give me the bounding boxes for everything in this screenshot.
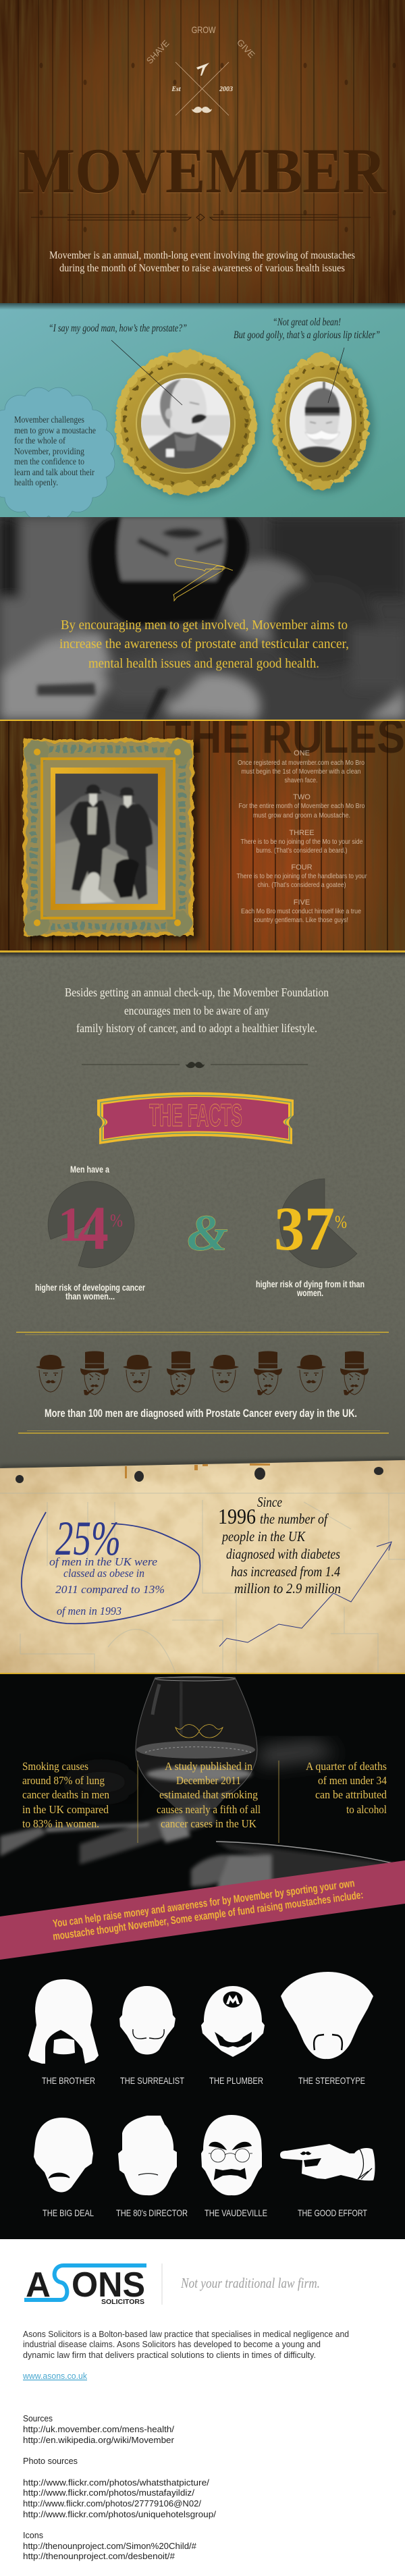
text: Movember aims: mental health issues and general good health. (88, 656, 319, 671)
icon: straight razor outline (173, 558, 233, 601)
style: the surrealist (119, 1986, 184, 2086)
rule five: Each Mo Bro must conduct himself like a true (241, 907, 361, 915)
panel: old paper (0, 1457, 405, 1673)
text: study December 2011: cancer cases in the UK (161, 1817, 257, 1830)
rule five: country gentleman. Like those guys! (254, 916, 348, 924)
sources: Sources (23, 2414, 53, 2423)
style: the 80's director: THE 80's DIRECTOR (116, 2207, 188, 2218)
rule four: chin. (That’s considered a goatee) (258, 881, 346, 889)
handwritten note: 25 percent obese: of men in the UK were (49, 1555, 157, 1568)
quote: prostate: “I say my good man, how’s the prostate?” (49, 323, 187, 334)
photo: moustached man in barber's chair (0, 517, 405, 720)
text: diabetes since 1996: Since (257, 1494, 282, 1510)
title: MOVEMBER: MOVEMBER (18, 135, 387, 207)
text: smoking causes: in the UK compared (22, 1803, 109, 1816)
figure: left gentleman (70, 784, 110, 891)
text: quarter of deaths: to alcohol (346, 1803, 387, 1816)
panel: wooden header (0, 0, 405, 303)
callout: scalloped blob: November, providing (14, 446, 84, 456)
text: smoking causes: to 83% in women. (22, 1817, 99, 1830)
portrait frame: left officer (117, 350, 259, 498)
style: the plumber (201, 1986, 265, 2086)
text: quarter of deaths: of men under 34 (318, 1774, 387, 1787)
moustache styles (28, 1972, 375, 2218)
callout: scalloped blob: Movember challenges (14, 414, 84, 425)
text: study December 2011: causes nearly a fifth of all (157, 1803, 261, 1816)
website link: www.asons.co.uk (22, 2371, 88, 2381)
style: the stereotype: THE STEREOTYPE (298, 2075, 365, 2086)
ampersand: & (187, 1205, 228, 1262)
rule one: ONE (294, 749, 310, 757)
intro paragraph (49, 250, 355, 274)
tagline: Not your traditional law firm. (180, 2275, 320, 2291)
style: the brother: THE BROTHER (42, 2075, 95, 2086)
line chart arrow (219, 1542, 392, 1646)
logo: Asons Solicitors (24, 2265, 146, 2306)
callout: scalloped blob: health openly. (14, 477, 58, 487)
rule two: TWO (293, 793, 310, 801)
text: study December 2011: A study published in (165, 1760, 252, 1773)
panel: smoke and alcohol (0, 1673, 405, 2239)
sources: http://thenounproject.com/desbenoit/# (23, 2552, 175, 2561)
text: smoking causes: around 87% of lung (22, 1774, 105, 1787)
text: diabetes since 1996: people in the UK (221, 1528, 306, 1545)
handwritten note: 25 percent obese: of men in 1993 (57, 1605, 122, 1617)
style: the good effort (280, 2144, 375, 2218)
logo: Asons Solicitors: A (26, 2265, 51, 2305)
sources: http://www.flickr.com/photos/mustafayildiz/ (23, 2488, 195, 2498)
style: the vaudeville: THE VAUDEVILLE (205, 2207, 267, 2218)
emblem: Est 2003 (144, 24, 257, 115)
text: study December 2011: estimated that smoking (159, 1788, 258, 1801)
rule two: must grow and groom a Moustache. (253, 811, 350, 820)
rule four: FOUR (291, 863, 313, 871)
title: MOVEMBER: MOVEMBER (18, 136, 387, 207)
ornamental divider (31, 214, 371, 221)
emblem: Est 2003: Est (171, 86, 182, 93)
style: the vaudeville (201, 2115, 267, 2218)
sources: Photo sources (23, 2457, 78, 2466)
callout: scalloped blob: men the confidence to (14, 456, 84, 466)
about paragraph: industrial disease claims. Asons Solicitors has developed to become a young and (23, 2340, 321, 2349)
sources: http://www.flickr.com/photos/uniquehotelsgroup/ (23, 2510, 217, 2519)
style: the plumber: THE PLUMBER (209, 2075, 263, 2086)
handwritten note: 25 percent obese: 2011 compared to 13% (55, 1583, 165, 1596)
rule one: Once registered at movember.com each Mo Bro (238, 759, 364, 767)
emblem: Est 2003: 2003 (219, 86, 233, 93)
callout: scalloped blob (0, 387, 115, 520)
intro paragraph: during the month of November to raise awareness of various health issues (59, 263, 345, 274)
callout: scalloped blob: learn and talk about their (14, 467, 94, 477)
style: the big deal (34, 2118, 94, 2218)
handwritten note: 25 percent obese: classed as obese in (63, 1567, 144, 1580)
stat: 14 percent: 1 (58, 1198, 82, 1252)
stat: 37 percent (256, 1179, 364, 1298)
text: diabetes since 1996: the number of (260, 1511, 329, 1527)
rules list (236, 749, 367, 924)
emblem: Est 2003: SHAVE (144, 38, 171, 65)
stat: 14 percent: higher risk of developing cancer (35, 1282, 145, 1293)
style: the good effort: THE GOOD EFFORT (298, 2207, 367, 2218)
panel: teal portraits wall (0, 303, 405, 520)
text: diabetes since 1996: million to 2.9 million (234, 1580, 341, 1596)
stat: 37 percent: % (335, 1212, 347, 1232)
style: the surrealist: THE SURREALIST (120, 2075, 184, 2086)
about paragraph (23, 2330, 349, 2360)
rule three (240, 829, 363, 855)
banner: THE FACTS (97, 1092, 294, 1144)
text: Movember aims: increase the awareness of prostate and testicular cancer, (59, 637, 349, 651)
stat: 14 percent (35, 1164, 145, 1302)
picture frame: two gentlemen with dogs (24, 740, 198, 940)
emblem: Est 2003: GROW (192, 24, 216, 35)
figure: black dog (113, 859, 139, 898)
panel: leather facts (0, 952, 405, 1472)
icons: row of gentlemen (36, 1351, 369, 1395)
quote: lip tickler: “Not great old bean! (273, 317, 341, 328)
rule five (241, 898, 361, 924)
text: annual check-up (65, 986, 329, 1035)
text: diabetes since 1996: diagnosed with diabetes (226, 1546, 340, 1562)
text: smoking causes (22, 1760, 109, 1830)
stat: 14 percent: % (110, 1210, 123, 1231)
handwritten note: 25 percent obese: 25% (55, 1511, 121, 1565)
rule two (239, 793, 365, 820)
rule three: burns. (That’s considered a beard.) (256, 847, 347, 855)
style: the 80's director (116, 2116, 188, 2218)
figure: right gentleman (115, 787, 153, 900)
photo: glass and cigar (0, 1677, 405, 1890)
text: smoking causes: cancer deaths in men (22, 1788, 109, 1801)
rule one: shaven face. (285, 776, 317, 784)
rule one (238, 749, 364, 784)
sources: http://uk.movember.com/mens-health/ (23, 2425, 175, 2434)
stat: 37 percent: 37 (274, 1194, 335, 1263)
text: quarter of deaths (306, 1760, 387, 1816)
sources (23, 2414, 217, 2561)
text: diabetes since 1996: has increased from 1.4 (231, 1563, 340, 1580)
sources: http://thenounproject.com/Simon%20Child/# (23, 2542, 196, 2551)
stat: 37 percent: women. (296, 1287, 323, 1298)
figure: collie (81, 872, 116, 904)
banner: THE FACTS: THE FACTS (149, 1098, 242, 1133)
rule three: There is to be no joining of the Mo to your side (240, 838, 363, 846)
text: Movember aims (59, 618, 349, 671)
text: Movember aims: By encouraging men to get involved, Movember aims to (61, 618, 348, 633)
stat: 14 percent: 4 (78, 1193, 109, 1262)
rule one: must begin the 1st of Movember with a clean (242, 768, 361, 776)
text: smoking causes: Smoking causes (22, 1760, 88, 1773)
panel: the rules (0, 710, 405, 952)
rule four (236, 863, 367, 889)
callout: scalloped blob: men to grow a moustache (14, 425, 96, 435)
text: annual check-up: Besides getting an annual check-up, the Movember Foundation (65, 986, 329, 999)
text: quarter of deaths: A quarter of deaths (306, 1760, 387, 1773)
about paragraph: dynamic law firm that delivers practical solutions to clients in times of difficulty. (23, 2351, 316, 2360)
pie chart: 14% wedge removed (48, 1181, 134, 1268)
pie chart: 37% wedge removed (280, 1179, 357, 1268)
panel: white footer (0, 2239, 405, 2576)
icon: moustache outline (176, 1725, 223, 1738)
rule two: For the entire month of Movember each Mo Bro (239, 802, 365, 810)
sources: Icons (23, 2531, 43, 2540)
text: diabetes since 1996: 1996 (218, 1504, 256, 1528)
binder holes (16, 1467, 383, 1483)
sources: http://www.flickr.com/photos/whatsthatpicture/ (23, 2478, 210, 2488)
pointer lines (111, 340, 344, 405)
style: the stereotype (281, 1972, 373, 2086)
panel: barber photo (0, 517, 405, 720)
sources: http://en.wikipedia.org/wiki/Movember (23, 2436, 174, 2445)
style: the big deal: THE BIG DEAL (43, 2207, 94, 2218)
rule four: There is to be no joining of the handlebars to your (236, 872, 367, 880)
rule three: THREE (289, 829, 315, 837)
logo: Asons Solicitors: SOLICITORS (101, 2298, 144, 2306)
quote: lip tickler (234, 317, 380, 341)
text: study December 2011: December 2011 (176, 1774, 241, 1787)
text: annual check-up: encourages men to be aware of any (124, 1004, 269, 1017)
style: the brother (28, 1979, 99, 2086)
handwritten note: 25 percent obese (22, 1511, 200, 1624)
rule five: FIVE (294, 898, 310, 907)
stat: 14 percent: Men have a (70, 1164, 109, 1175)
moustache divider (82, 1062, 308, 1068)
sources: http://www.flickr.com/photos/27779106@N02/ (23, 2499, 202, 2508)
ribbon: raise money (0, 1860, 405, 1960)
logo: Asons Solicitors: ONS (72, 2265, 145, 2305)
text: diabetes since 1996 (218, 1494, 341, 1596)
portrait frame: right general (274, 352, 374, 493)
emblem: Est 2003: GIVE (235, 37, 257, 60)
text: study December 2011 (157, 1760, 261, 1830)
stat: 37 percent: higher risk of dying from it than (256, 1279, 364, 1289)
text: annual check-up: family history of cancer, and to adopt a healthier lifestyle. (76, 1021, 317, 1035)
intro paragraph: Movember is an annual, month-long event involving the growing of moustaches (49, 250, 355, 261)
about paragraph: Asons Solicitors is a Bolton-based law practice that specialises in medical negligence and (23, 2330, 349, 2339)
callout: scalloped blob: for the whole of (14, 435, 65, 446)
text: quarter of deaths: can be attributed (315, 1788, 387, 1801)
stat: 14 percent: than women... (65, 1291, 115, 1302)
